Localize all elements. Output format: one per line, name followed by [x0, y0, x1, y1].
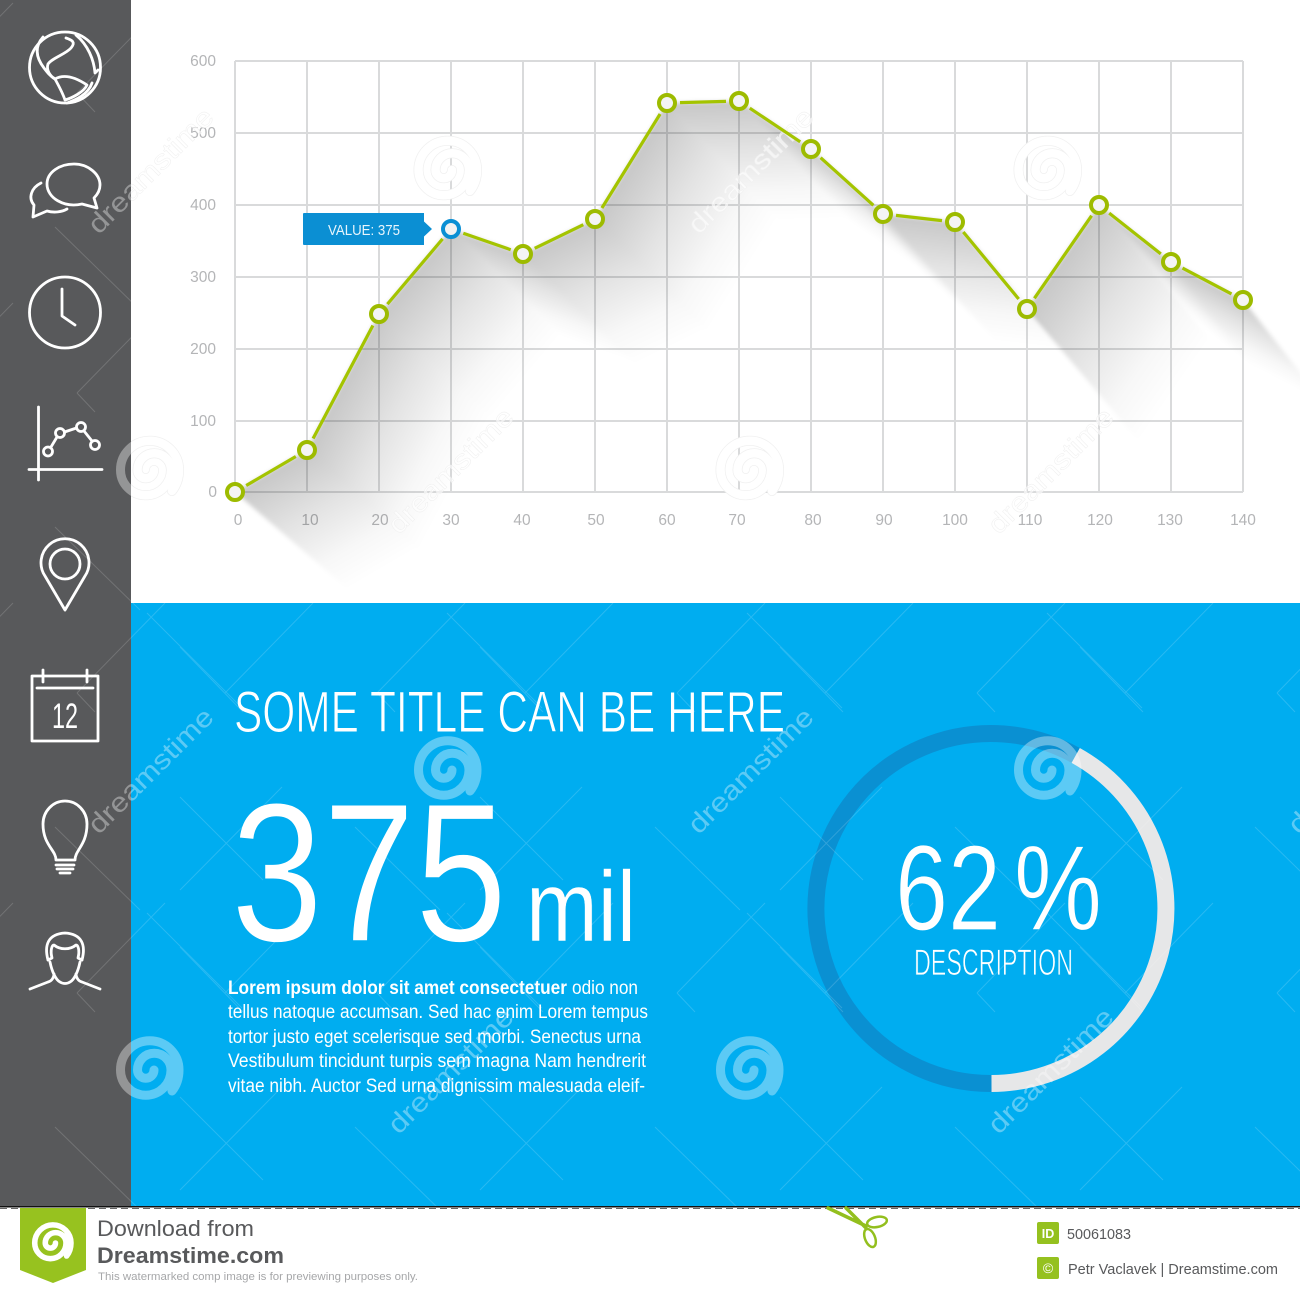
icon: globe	[30, 32, 100, 103]
icon: calendar: 12	[52, 697, 78, 736]
x axis labels: 90	[875, 512, 893, 529]
x axis labels: 70	[728, 512, 746, 529]
title: SOME TITLE CAN BE HERE	[234, 680, 785, 745]
y axis labels: 200	[190, 341, 216, 358]
x axis labels: 140	[1230, 512, 1256, 529]
sidebar	[0, 0, 131, 1206]
author credit: Petr Vaclavek | Dreamstime.com	[1068, 1262, 1278, 1278]
percent sign: %	[1014, 820, 1102, 956]
icon: person	[30, 933, 100, 989]
blue panel	[131, 603, 1300, 1206]
icon: light bulb	[43, 801, 87, 873]
icon: calendar	[32, 670, 98, 741]
watermark notice: This watermarked comp image is for previewing purposes only.	[98, 1271, 418, 1283]
x axis labels: 20	[371, 512, 389, 529]
cut line	[0, 1206, 1300, 1208]
x axis labels: 30	[442, 512, 460, 529]
icon: line chart	[29, 407, 102, 480]
x axis labels: 40	[513, 512, 531, 529]
x axis labels: 50	[587, 512, 605, 529]
y axis labels: 300	[190, 269, 216, 286]
y axis labels: 400	[190, 197, 216, 214]
body paragraph: odio non	[572, 978, 638, 999]
watermark overlay on blue and sidebar: dreamstime	[382, 1002, 520, 1140]
copyright badge	[1037, 1257, 1059, 1279]
body paragraph	[228, 978, 648, 1097]
watermark overlay on blue and sidebar: dreamstime	[82, 102, 220, 240]
big number: 375	[231, 762, 507, 983]
donut description: DESCRIPTION	[914, 942, 1073, 983]
site name: Dreamstime.com	[97, 1243, 284, 1268]
unit label: mil	[526, 851, 636, 963]
chart panel	[82, 53, 1300, 588]
highlighted data point	[443, 221, 459, 237]
x axis labels: 100	[942, 512, 968, 529]
sidebar icons	[29, 32, 102, 989]
tooltip: value 375	[303, 213, 432, 245]
long shadow under line	[235, 101, 1300, 588]
faint watermarks on white area: dreamstime	[82, 102, 220, 240]
body paragraph: tortor justo eget scelerisque sed morbi. Senectus urna	[228, 1027, 641, 1048]
body paragraph: Vestibulum tincidunt turpis sem magna Nam hendrerit	[228, 1051, 647, 1072]
y axis labels	[190, 53, 217, 501]
footer strip	[0, 1206, 1300, 1283]
id badge	[1037, 1222, 1059, 1244]
faint watermarks on white area	[82, 102, 1120, 540]
id badge: ID	[1042, 1227, 1054, 1241]
x axis labels: 0	[234, 512, 243, 529]
watermark overlay on blue and sidebar: dreamstime	[682, 702, 820, 840]
donut remainder arc	[816, 734, 1076, 1084]
body paragraph: Lorem ipsum dolor sit amet consectetuer	[228, 978, 568, 999]
icon: speech bubbles	[31, 164, 100, 217]
faint watermarks on white area: dreamstime	[682, 102, 820, 240]
donut chart 62 percent	[816, 734, 1166, 1084]
y axis labels: 0	[208, 484, 217, 501]
body paragraph: vitae nibh. Auctor Sed urna dignissim malesuada eleif-	[228, 1076, 645, 1097]
x axis labels: 10	[301, 512, 319, 529]
faint watermarks on white area: dreamstime	[982, 402, 1120, 540]
donut value arc	[992, 755, 1166, 1084]
chart grid	[235, 61, 1243, 492]
copyright badge: ©	[1043, 1260, 1054, 1276]
watermark overlay on blue and sidebar: dreamstime	[982, 1002, 1120, 1140]
x axis labels: 60	[658, 512, 676, 529]
y axis labels: 500	[190, 125, 216, 142]
x axis labels: 130	[1157, 512, 1183, 529]
icon: clock	[30, 277, 100, 348]
x axis labels: 80	[804, 512, 822, 529]
watermark overlay on blue and sidebar: dreamstime	[82, 702, 220, 840]
image id: 50061083	[1067, 1227, 1131, 1243]
body paragraph: tellus natoque accumsan. Sed hac enim Lorem tempus	[228, 1002, 648, 1023]
icon: green badge	[20, 1208, 86, 1283]
x axis labels: 120	[1087, 512, 1113, 529]
data line segments	[246, 101, 1231, 486]
icon: map pin	[41, 539, 89, 610]
x axis labels	[234, 512, 1256, 529]
data points	[227, 93, 1251, 500]
x axis labels: 110	[1018, 512, 1043, 529]
percent value: 62	[895, 820, 1001, 956]
tooltip: value 375: VALUE: 375	[328, 222, 400, 239]
y axis labels: 600	[190, 53, 216, 70]
y axis labels: 100	[190, 413, 216, 430]
icon: scissors	[828, 1208, 888, 1249]
faint watermarks on white area: dreamstime	[382, 402, 520, 540]
download heading: Download from	[97, 1216, 254, 1241]
